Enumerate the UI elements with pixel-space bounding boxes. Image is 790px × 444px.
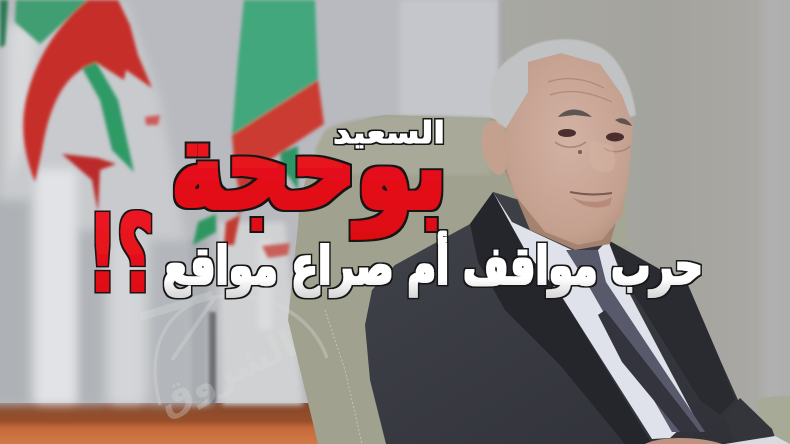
mouth: [570, 192, 612, 194]
flag red crescent: [23, 0, 152, 182]
tie: [566, 250, 705, 432]
neck: [505, 170, 625, 250]
man: suit jacket: [365, 192, 790, 444]
wooden table edge: [0, 403, 335, 444]
man: head: [481, 39, 636, 250]
left Algerian flag: [0, 0, 303, 405]
flag crescent tip green: [82, 62, 134, 172]
forehead wrinkles: [548, 79, 612, 102]
ear: [481, 121, 508, 175]
hand and papers: [645, 438, 722, 444]
flag green band: [15, 0, 88, 44]
main red title: بوحجة: [171, 95, 447, 239]
flag cloth pleats: [0, 0, 215, 405]
white headline: حرب مواقف أم صراع مواقع: [163, 231, 703, 298]
nose: [589, 140, 615, 172]
shirt: [493, 192, 694, 439]
red exclamation marks: !؟: [88, 192, 154, 316]
brows: [558, 109, 592, 117]
flag star: [62, 154, 116, 212]
second Algerian flag: [193, 0, 324, 258]
hair: [490, 39, 636, 130]
mole: [578, 150, 582, 154]
watermark logo: [140, 295, 327, 424]
eyes: [558, 129, 576, 137]
subtitle name: السعيد: [333, 116, 445, 151]
eye bags: [555, 142, 630, 152]
armchair: [288, 115, 790, 444]
face: [506, 53, 633, 245]
watermark logo: الشروق: [151, 321, 303, 424]
